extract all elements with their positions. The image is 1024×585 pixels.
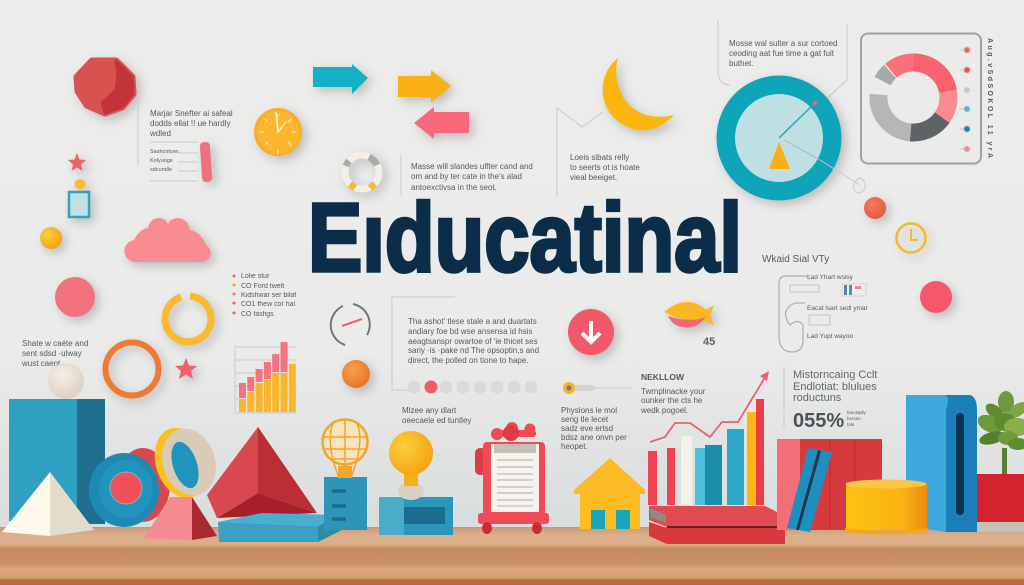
text block: top right note: buthet. (729, 59, 753, 68)
icon: crescent moon (603, 58, 674, 130)
text list: legend: CO Ford twelt (241, 283, 284, 290)
text block: neklow note: ounker the cts he (641, 396, 703, 405)
text block: physlons note: heopet. (561, 442, 588, 451)
text list: legend: CO fasfigs (241, 311, 274, 318)
icon: yellow ring (165, 296, 211, 342)
text block: neklow note: NEKLLOW (641, 372, 685, 382)
wooden table (0, 527, 1024, 585)
icon: yellow ball (40, 227, 62, 249)
text block: top left note: wdled (149, 129, 171, 138)
vertical caption: Aug.vSdSOKOL 11 yrA (986, 38, 993, 158)
object: yellow open ring (146, 421, 224, 505)
object: pink pyramid (144, 497, 217, 540)
arrow: teal (313, 64, 368, 94)
object: tall blue case (906, 395, 977, 532)
object: tall blue box (9, 399, 105, 524)
text block: top right note (718, 20, 847, 102)
text list: legend: Lolie stur (241, 273, 270, 280)
icon: red star (175, 358, 197, 379)
object: wire globe lamp on box (322, 420, 368, 530)
text block: physlons note: seng tle lecet (561, 415, 609, 424)
text block: left note: wust caent (21, 359, 61, 368)
bar chart: stacked bars (235, 342, 297, 413)
text block: neklow note: Twrnplinacke your (641, 387, 706, 396)
chart: desk bar models (648, 399, 764, 505)
connector (820, 160, 865, 193)
text block: top left note (138, 103, 233, 181)
text block: top left note: Sashcolcen (150, 149, 178, 155)
object: yellow cylinder (845, 480, 928, 534)
text block: left note (21, 339, 88, 368)
text block: top right note: ceoding aat fue time a gat fuit (729, 49, 835, 58)
stat block: 055% (784, 367, 877, 432)
text block: under dots: Mlzee any dlart (402, 406, 457, 415)
icon: fish candy (664, 302, 714, 328)
text list: legend: Kidshwar ser bilaf (241, 292, 296, 299)
icon: red download button (568, 309, 614, 355)
text block: top right note: Mosse wal sulter a sur cortoed (729, 39, 838, 48)
icon: red circle (920, 281, 952, 313)
number: 45: 45 (703, 336, 715, 348)
icon: bottle (69, 179, 89, 217)
icon: orange ball (864, 197, 886, 219)
object: yellow bulb on box (379, 431, 453, 535)
donut segments (878, 62, 948, 132)
stat block: 055%: 055% (793, 410, 844, 432)
arrow: pink (414, 107, 469, 139)
main title: Eıducatinal (308, 183, 742, 292)
text block: central note: andiary foe bd wse ansensa id hsis (408, 327, 533, 336)
text block: central note: direct, the polled on tione to hape. (408, 356, 529, 365)
icon: pink star (68, 153, 86, 171)
icon: orange ring (106, 342, 158, 396)
object: blue disc (89, 453, 159, 527)
icon: broken C ring (345, 155, 379, 189)
text block: physlons note (561, 406, 627, 451)
text block: physlons note: sadz eve ertsd (561, 424, 613, 433)
text block: left note: sent sdsd ·ulway (22, 349, 82, 358)
text block: top left note: Kolyuogs (150, 158, 173, 164)
text block: top left note: dodds ellat !! ue hardly (150, 119, 230, 128)
object: red clipboard (475, 422, 549, 534)
text block: physlons note: bdsz ane onvn per (561, 433, 627, 442)
stat block: 055%: Mistorncaing Cclt (793, 369, 877, 381)
object: red book stack (649, 506, 785, 544)
text block: moon note (557, 108, 640, 197)
icon: gauge (331, 304, 370, 345)
icon: pink circle (55, 277, 95, 317)
stat block: 055%: Endlotiat: blulues (793, 381, 877, 393)
icon: orange ball small (342, 360, 370, 388)
text block: under dots: oeecaele ed tuntley (402, 416, 471, 425)
text block: under dots (402, 406, 471, 425)
text block: moon note: to seerts ot is hoate (570, 163, 640, 172)
object: blue slab (218, 513, 342, 542)
stat block: 055%: tots (847, 422, 855, 427)
text block: central note: sariy ·is ·pake nd The opsoptin,s and (408, 346, 539, 355)
diagram: right side workflow: Wkaid Sial VTy (762, 254, 829, 265)
object: red disc behind (116, 448, 170, 522)
object: red binder block (777, 439, 882, 530)
object: cream pyramid (2, 472, 94, 536)
stat block: 055%: roductuns (793, 392, 842, 404)
stat block: 055%: fannsiplly (847, 410, 867, 415)
text block: central note: aeagtsanspr owartoe of 'ie thicet ses (408, 337, 538, 346)
diagram: right side workflow: Lad Yupt wayoo (807, 333, 854, 340)
donut legend markers (959, 47, 970, 152)
text block: centre top note (401, 155, 533, 196)
object: blue leaning book (787, 448, 832, 532)
icon: orange clock (254, 108, 302, 156)
icon: pink chalk (200, 142, 212, 182)
text block: central note: Tha ashot' tlese stale a and duartats (408, 317, 537, 326)
icon: cloud (124, 218, 211, 262)
chart: teal radial dial (716, 76, 842, 200)
diagram: right side workflow: Lad Yhart wsisy (807, 274, 854, 281)
text block: central note (392, 297, 539, 390)
icon: white ball (48, 363, 84, 399)
text block: physlons note: Physlons le mol (561, 406, 617, 415)
diagram: right side workflow: Eacat lsart sedl ymat (807, 305, 868, 312)
text list: legend (232, 273, 296, 318)
arrow: yellow (398, 70, 451, 103)
text block: centre top note: Masse will slandes ulfter cand and (411, 162, 533, 171)
panel: donut chart (861, 34, 981, 164)
icon: yellow outline clock (896, 224, 926, 252)
progress dots (408, 380, 538, 394)
text block: moon note: Loeis sibats relly (570, 153, 629, 162)
text block: top left note: sdcundle (150, 167, 172, 173)
text block: neklow note: wedk pogoel. (640, 406, 688, 415)
text block: centre top note: om and by ter cate in the's alad (411, 172, 522, 181)
text block: left note: Shate w caéte and (22, 339, 88, 348)
chart: rising trend line (650, 371, 769, 442)
object: big red pyramid (207, 427, 317, 518)
stat block: 055%: herson (847, 416, 861, 421)
text list: legend: CO1 fhew cor hal (241, 301, 296, 308)
object: yellow house (574, 458, 645, 529)
text block: moon note: vieal beeiget. (570, 173, 617, 182)
diagram: right side workflow (762, 254, 868, 352)
text block: neklow note (640, 372, 706, 415)
text block: centre top note: antoexctivsa in the seot. (411, 183, 497, 192)
icon: red polyhedron (77, 61, 133, 113)
object: plant in red pot (975, 391, 1024, 532)
timeline marker (563, 382, 632, 394)
text block: top left note: Marjar Snefter ai safeal (150, 109, 233, 118)
